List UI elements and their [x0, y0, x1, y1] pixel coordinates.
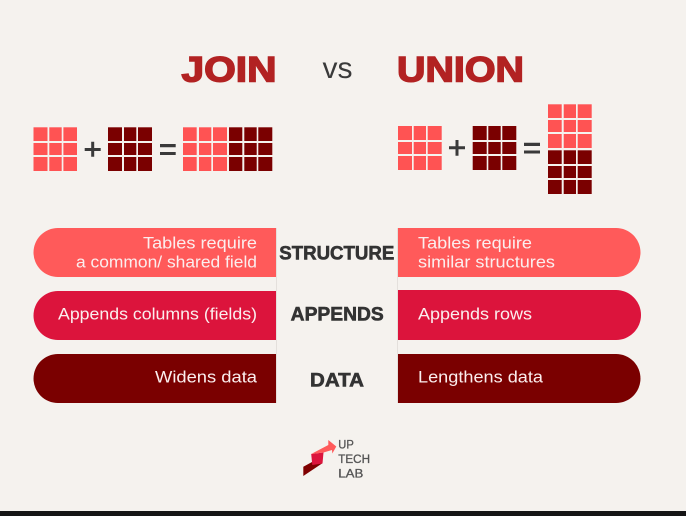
join pill: appends: Appends columns (fields) [58, 304, 257, 323]
union pill: appends [398, 290, 641, 340]
row: data [34, 354, 640, 403]
join pill: data [34, 354, 276, 403]
logo wordmark: TECH [338, 454, 370, 466]
title: UNION: UNION [397, 50, 524, 90]
union table A [398, 126, 442, 170]
row: appends [34, 290, 641, 340]
join equals sign [160, 144, 176, 155]
union table B [473, 126, 516, 170]
join pill: appends [34, 291, 276, 340]
logo: up tech lab [303, 440, 370, 480]
join pill: structure: Tables require [143, 233, 257, 252]
join plus sign [85, 142, 101, 157]
title: JOIN: JOIN [182, 50, 276, 90]
label: data: DATA [310, 371, 364, 392]
label: structure: STRUCTURE [279, 243, 394, 264]
union equals sign [524, 143, 540, 154]
union pill: data [398, 354, 640, 403]
logo wordmark: LAB [338, 468, 364, 480]
union pill: appends: Appends rows [418, 304, 532, 323]
logo wordmark [338, 440, 370, 480]
union pill: structure: similar structures [418, 252, 555, 272]
join result table [183, 127, 272, 171]
union pill: structure: Tables require [418, 233, 532, 252]
title: vs: vs [322, 52, 352, 85]
join pill: structure: a common/ shared field [76, 252, 257, 272]
union result table [548, 104, 592, 194]
row: structure [34, 228, 640, 277]
union pill: structure [398, 228, 640, 277]
join diagram [34, 127, 272, 171]
union pill: data: Lengthens data [418, 368, 544, 387]
label: appends: APPENDS [291, 305, 384, 326]
union plus sign [449, 140, 465, 156]
join table A [34, 127, 77, 171]
join pill: data: Widens data [155, 368, 258, 387]
logo wordmark: UP [338, 440, 354, 452]
logo arrow [303, 440, 336, 476]
join table B [108, 127, 152, 171]
join pill: structure [34, 228, 276, 277]
bottom bar [0, 511, 686, 516]
union diagram [398, 104, 592, 194]
